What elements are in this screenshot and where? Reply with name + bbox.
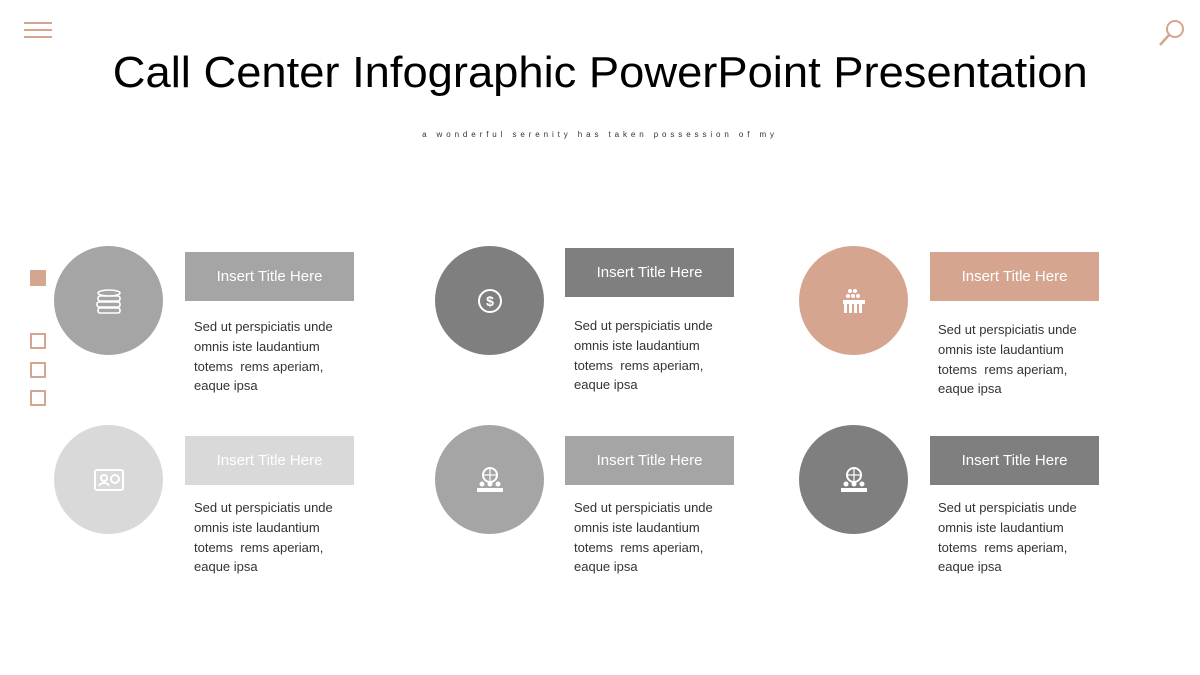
panel: item 6: [799, 425, 1099, 574]
icon: global network: [435, 425, 544, 534]
title box: Insert Title Here: [597, 452, 702, 469]
icon: global network: [799, 425, 908, 534]
title box: [185, 252, 354, 301]
text: Sed ut perspiciatis unde omnis iste laudantium totems rems aperiam, eaque ipsa: [194, 319, 333, 393]
icon: menu: [24, 22, 52, 38]
title box: Insert Title Here: [962, 452, 1067, 469]
panel: item 5: [435, 425, 734, 574]
title box: [565, 248, 734, 297]
text: Sed ut perspiciatis unde omnis iste laudantium totems rems aperiam, eaque ipsa: [574, 500, 713, 574]
title box: [185, 436, 354, 485]
subtitle: a wonderful serenity has taken possession of my: [422, 130, 778, 139]
icon: search: [1159, 20, 1184, 46]
title: Call Center Infographic PowerPoint Presentation: [113, 48, 1087, 97]
title box: [930, 252, 1099, 301]
icon: dollar: $: [486, 292, 494, 308]
text: Sed ut perspiciatis unde omnis iste laudantium totems rems aperiam, eaque ipsa: [574, 318, 713, 392]
icon: dollar: [435, 246, 544, 355]
side navigation squares: [30, 270, 46, 406]
text: Sed ut perspiciatis unde omnis iste laudantium totems rems aperiam, eaque ipsa: [938, 322, 1077, 396]
panel: item 1: [54, 246, 354, 393]
title box: Insert Title Here: [217, 452, 322, 469]
icon: id card: [54, 425, 163, 534]
panel: item 3: [799, 246, 1099, 396]
title box: Insert Title Here: [597, 264, 702, 281]
panel: item 2: [435, 246, 734, 392]
title box: Insert Title Here: [962, 268, 1067, 285]
icon: coins: [54, 246, 163, 355]
title box: [930, 436, 1099, 485]
text: Sed ut perspiciatis unde omnis iste laudantium totems rems aperiam, eaque ipsa: [938, 500, 1077, 574]
title box: [565, 436, 734, 485]
text: Sed ut perspiciatis unde omnis iste laudantium totems rems aperiam, eaque ipsa: [194, 500, 333, 574]
panel: item 4: [54, 425, 354, 574]
title box: Insert Title Here: [217, 268, 322, 285]
icon: team: [799, 246, 908, 355]
